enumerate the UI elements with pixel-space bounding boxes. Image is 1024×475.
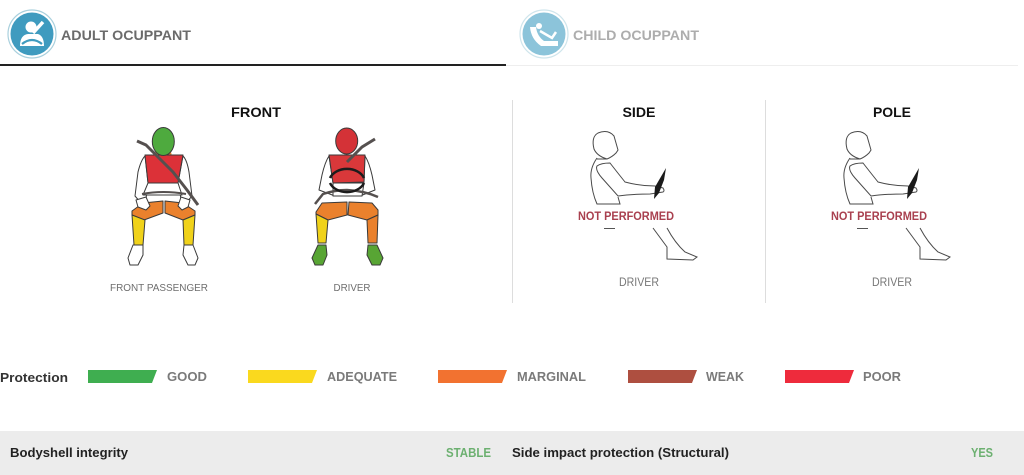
legend item: poor: POOR (863, 369, 902, 384)
figure: driver (312, 128, 383, 265)
heading: side: SIDE (622, 104, 656, 120)
icon: child seat (520, 10, 568, 58)
figure: front passenger (128, 128, 198, 265)
heading: child ocuppant: CHILD OCUPPANT (573, 27, 699, 43)
status: bodyshell integrity: Bodyshell integrity (10, 445, 129, 460)
legend item: weak (628, 369, 745, 384)
legend item: good: GOOD (167, 369, 207, 384)
label: driver: DRIVER (872, 275, 912, 289)
legend item: weak: WEAK (706, 369, 745, 384)
legend item: marginal (438, 369, 586, 384)
tab: child occupant (506, 10, 1018, 66)
legend: protection (0, 369, 902, 385)
value: stable: STABLE (446, 445, 491, 460)
legend item: adequate: ADEQUATE (327, 369, 397, 384)
stamp: not performed: NOT PERFORMED (578, 211, 674, 223)
heading: pole: POLE (873, 104, 911, 120)
heading: adult ocuppant: ADULT OCUPPANT (61, 27, 191, 43)
icon: adult seatbelt (8, 10, 56, 58)
status: side impact protection: Side impact protection (Structural) (512, 445, 729, 460)
legend item: good (88, 369, 207, 384)
figure: pole driver (844, 132, 950, 260)
stamp: not performed: NOT PERFORMED (831, 211, 927, 223)
label: driver: DRIVER (334, 283, 370, 294)
tab: adult occupant (0, 10, 506, 66)
figure: side driver (591, 132, 697, 260)
heading: front: FRONT (231, 104, 281, 120)
legend item: adequate (248, 369, 397, 384)
legend item: poor (785, 369, 902, 384)
panel: side (578, 104, 697, 289)
legend item: marginal: MARGINAL (517, 369, 586, 384)
label: driver: DRIVER (619, 275, 659, 289)
label: front passenger: FRONT PASSENGER (110, 283, 208, 294)
status bar (0, 431, 1024, 475)
value: yes: YES (971, 445, 993, 460)
panel: pole (831, 104, 950, 289)
legend title: Protection (0, 370, 68, 385)
